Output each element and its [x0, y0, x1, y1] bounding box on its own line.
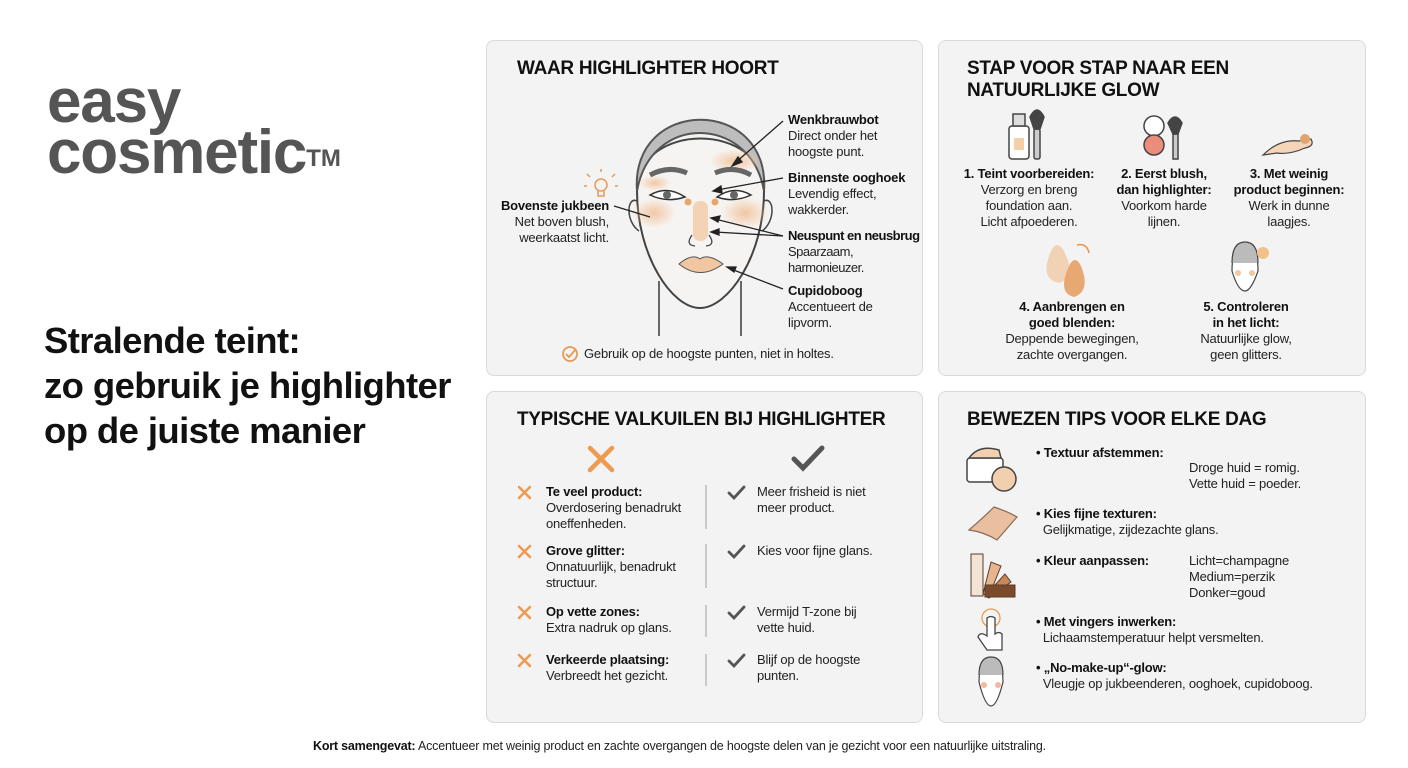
- tip: vingers: • Met vingers inwerken:: [1036, 614, 1176, 629]
- step 4: goed blenden:: [1029, 315, 1115, 330]
- step 1: Licht afpoederen.: [980, 214, 1078, 229]
- panel: valkuilen: [486, 391, 923, 723]
- heading: STAP VOOR STAP NAAR EEN: [967, 58, 1229, 79]
- label: bovenste jukbeen: Bovenste jukbeen: [501, 198, 609, 213]
- pitfall 2: Onnatuurlijk, benadrukt: [546, 559, 676, 574]
- tip: textuur: • Textuur afstemmen:: [1036, 445, 1163, 460]
- logo: cosmeticTM: [47, 118, 341, 187]
- tip: texturen: Gelijkmatige, zijdezachte glans.: [1043, 522, 1219, 537]
- pitfall 3: Op vette zones:: [546, 604, 640, 619]
- pitfall 1: oneffenheden.: [546, 516, 626, 531]
- logo: easy: [47, 67, 180, 136]
- tip: no make-up: [1036, 660, 1313, 691]
- icon: blush compact: [1144, 116, 1182, 159]
- footer summary: Kort samengevat: Accentueer met weinig product en zachte overgangen de hoogste delen van je gezicht voor een natuurlijke uitstraling.: [313, 739, 1046, 753]
- step 3: 3. Met weinig: [1250, 166, 1328, 181]
- step 5: [1200, 299, 1292, 362]
- pitfall 1: Overdosering benadrukt: [546, 500, 681, 515]
- label: cupidoboog: lipvorm.: [788, 315, 832, 330]
- pitfall 4: [546, 652, 669, 683]
- step 1: foundation aan.: [986, 198, 1072, 213]
- label: wenkbrauwbot: Wenkbrauwbot: [788, 112, 879, 127]
- icon: check circle: [563, 347, 577, 361]
- icon: lightbulb: [584, 169, 618, 196]
- heading: BEWEZEN TIPS VOOR ELKE DAG: [967, 409, 1266, 430]
- label: binnenste ooghoek: wakkerder.: [788, 202, 849, 217]
- step 2: Voorkom harde: [1121, 198, 1207, 213]
- label: cupidoboog: Accentueert de: [788, 299, 873, 314]
- panel: tips: Vette huid = poeder.: [1189, 476, 1301, 491]
- pitfall 2: structuur.: [546, 575, 597, 590]
- label: cupidoboog: [788, 283, 873, 330]
- label: wenkbrauwbot: [788, 112, 879, 159]
- label: bovenste jukbeen: [501, 198, 609, 245]
- fix 3: [757, 604, 856, 635]
- step 2: 2. Eerst blush,: [1121, 166, 1207, 181]
- icon: face in light: [1232, 242, 1269, 291]
- panel: tips: Donker=goud: [1189, 585, 1265, 600]
- fix 4: [757, 652, 860, 683]
- label: binnenste ooghoek: Binnenste ooghoek: [788, 170, 905, 185]
- label: wenkbrauwbot: Direct onder het: [788, 128, 877, 143]
- fix 1: [757, 484, 866, 515]
- heading: WAAR HIGHLIGHTER HOORT: [517, 58, 778, 79]
- icon: big check: [794, 448, 822, 468]
- headline: Stralende teint:: [44, 320, 300, 361]
- panel: tips: Droge huid = romig.: [1189, 460, 1300, 475]
- step 1: Verzorg en breng: [981, 182, 1077, 197]
- tip: no make-up: Vleugje op jukbeenderen, ooghoek, cupidoboog.: [1043, 676, 1313, 691]
- step 4: 4. Aanbrengen en: [1019, 299, 1125, 314]
- step 2: dan highlighter:: [1116, 182, 1212, 197]
- pitfall 3: Extra nadruk op glans.: [546, 620, 672, 635]
- tip line: Gebruik op de hoogste punten, niet in holtes.: [584, 346, 834, 361]
- icon: sponges: [1046, 245, 1089, 297]
- step 2: [1116, 166, 1212, 229]
- panel: tips: Licht=champagne: [1189, 553, 1289, 568]
- step 2: lijnen.: [1148, 214, 1180, 229]
- step 5: in het licht:: [1213, 315, 1279, 330]
- label: neuspunt: Neuspunt en neusbrug: [788, 228, 920, 243]
- fix 1: meer product.: [757, 500, 835, 515]
- headline: zo gebruik je highlighter: [44, 365, 451, 406]
- label: wenkbrauwbot: hoogste punt.: [788, 144, 864, 159]
- step 5: 5. Controleren: [1203, 299, 1289, 314]
- step 1: 1. Teint voorbereiden:: [964, 166, 1094, 181]
- headline: op de juiste manier: [44, 410, 365, 451]
- tip: texturen: [1036, 506, 1219, 537]
- fix 4: Blijf op de hoogste: [757, 652, 860, 667]
- pitfall 1: Te veel product:: [546, 484, 642, 499]
- step 3: Werk in dunne: [1248, 198, 1330, 213]
- heading: [967, 58, 1229, 101]
- panel: tips: Medium=perzik: [1189, 569, 1275, 584]
- tip: vingers: [1036, 614, 1264, 645]
- icon: touch finger: [978, 609, 1002, 650]
- label: cupidoboog: Cupidoboog: [788, 283, 863, 298]
- step 5: Natuurlijke glow,: [1200, 331, 1292, 346]
- tip: no make-up: • „No-make-up“-glow:: [1036, 660, 1167, 675]
- fix 3: vette huid.: [757, 620, 815, 635]
- tip: vingers: Lichaamstemperatuur helpt versmelten.: [1043, 630, 1264, 645]
- pitfall 2: Grove glitter:: [546, 543, 625, 558]
- tip: texturen: • Kies fijne texturen:: [1036, 506, 1157, 521]
- fix 1: Meer frisheid is niet: [757, 484, 866, 499]
- label: neuspunt: harmonieuzer.: [788, 260, 864, 275]
- panel: tips: [938, 391, 1366, 723]
- icon: big cross: [590, 448, 612, 470]
- headline: [44, 320, 451, 451]
- step 5: geen glitters.: [1210, 347, 1282, 362]
- step 4: zachte overgangen.: [1017, 347, 1127, 362]
- step 3: [1234, 166, 1344, 229]
- step 1: [964, 166, 1094, 229]
- heading: TYPISCHE VALKUILEN BIJ HIGHLIGHTER: [517, 409, 885, 430]
- step 4: [1005, 299, 1139, 362]
- logo: [47, 67, 341, 187]
- face illustration: [562, 118, 784, 362]
- icon: foundation and brush: [1009, 110, 1044, 159]
- icon: hand: [1263, 134, 1312, 155]
- heading: NATUURLIJKE GLOW: [967, 80, 1159, 101]
- fix 3: Vermijd T-zone bij: [757, 604, 856, 619]
- step 3: laagjes.: [1267, 214, 1311, 229]
- pitfall 1: [546, 484, 682, 531]
- pitfall 4: Verkeerde plaatsing:: [546, 652, 669, 667]
- panel: waar highlighter hoort: [486, 40, 923, 376]
- icon: fabric: [969, 507, 1017, 540]
- label: neuspunt: [788, 228, 920, 275]
- pitfall 2: [546, 543, 676, 590]
- label: binnenste ooghoek: Levendig effect,: [788, 186, 876, 201]
- label: bovenste jukbeen: Net boven blush,: [515, 214, 609, 229]
- icon: face: [979, 657, 1003, 706]
- icon: swatches: [971, 554, 1015, 598]
- tip: kleur: • Kleur aanpassen:: [1036, 553, 1149, 568]
- fix 2: Kies voor fijne glans.: [757, 543, 873, 558]
- icon: cream jar: [967, 448, 1016, 491]
- panel: stap voor stap: [938, 40, 1366, 376]
- step 3: product beginnen:: [1234, 182, 1344, 197]
- pitfall 3: [546, 604, 672, 635]
- step 4: Deppende bewegingen,: [1005, 331, 1139, 346]
- label: neuspunt: Spaarzaam,: [788, 244, 853, 259]
- fix 4: punten.: [757, 668, 799, 683]
- label: bovenste jukbeen: weerkaatst licht.: [519, 230, 609, 245]
- label: binnenste ooghoek: [788, 170, 906, 217]
- pitfall 4: Verbreedt het gezicht.: [546, 668, 668, 683]
